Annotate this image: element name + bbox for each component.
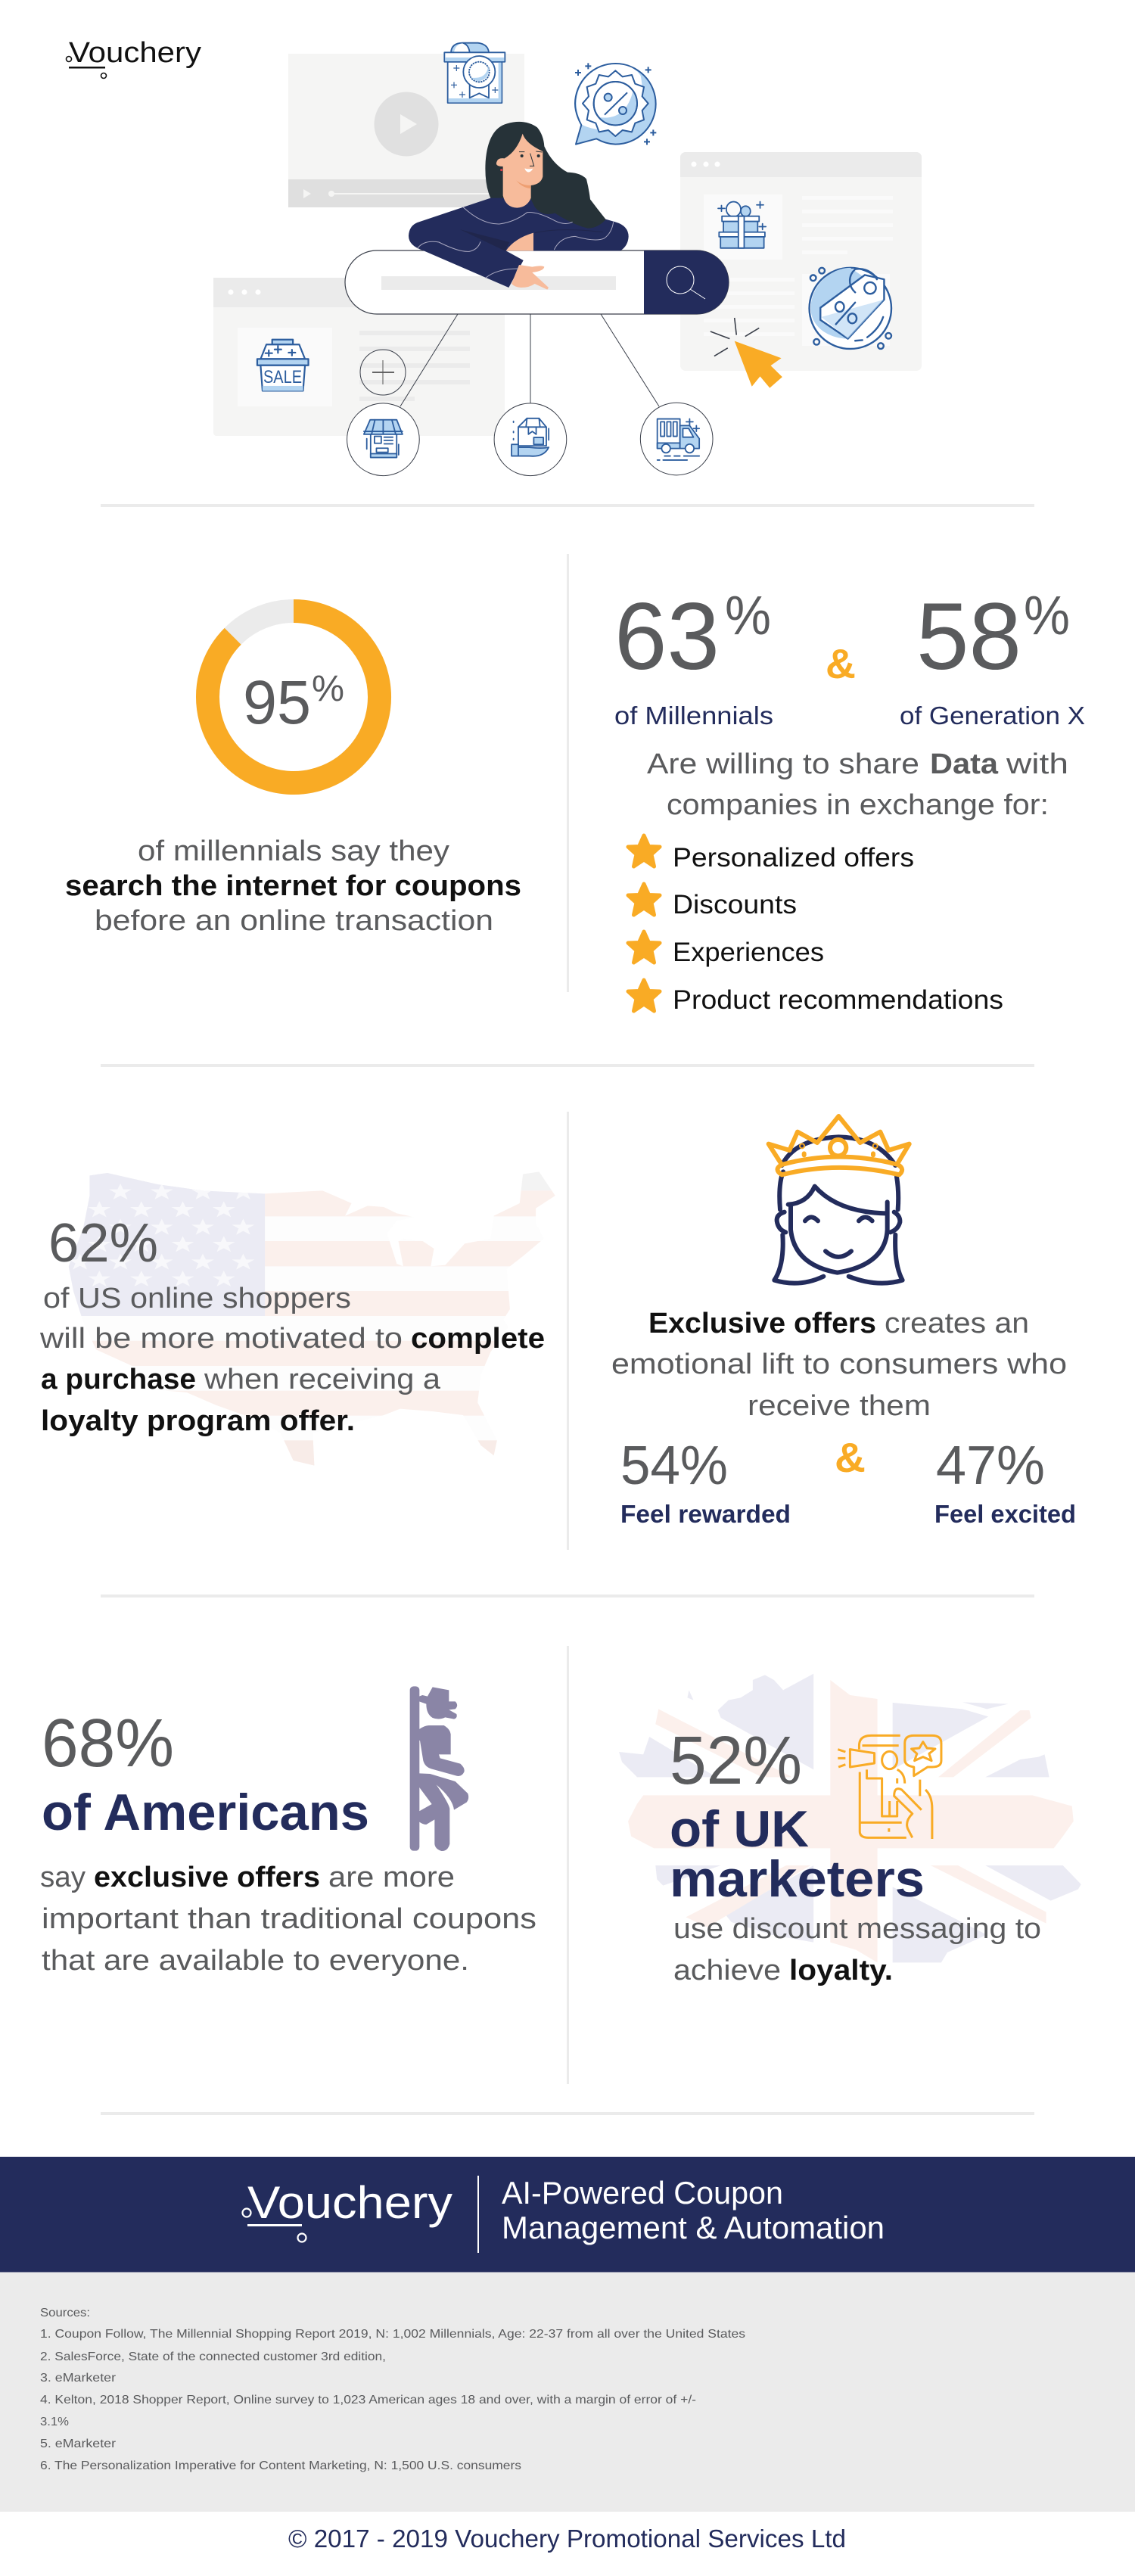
- sources panel: 5. eMarketer: [40, 2438, 117, 2450]
- donut label: %: [312, 669, 344, 709]
- copyright: © 2017 - 2019 Vouchery Promotional Services Ltd: [288, 2525, 846, 2553]
- icon: mobile megaphone: [838, 1735, 941, 1839]
- divider: [101, 504, 1034, 507]
- stat: 47 percent: [934, 1436, 1076, 1528]
- stat: 52 percent: 52%: [670, 1723, 802, 1799]
- subheading: marketers: [670, 1850, 925, 1908]
- intro text: Are willing to share: [647, 748, 919, 780]
- plus button: [360, 350, 406, 395]
- SALE label: SALE: [263, 367, 302, 387]
- sources panel: [0, 2272, 1135, 2512]
- panel: US shoppers: [39, 1165, 568, 1473]
- sources panel: 6. The Personalization Imperative for Content Marketing, N: 1,500 U.S. consumers: [40, 2459, 521, 2472]
- subheading: of Americans: [42, 1784, 369, 1841]
- donut label: 95: [243, 668, 311, 737]
- description: complete: [411, 1323, 545, 1355]
- description: [65, 835, 521, 937]
- stat: 63 percent: [614, 584, 773, 730]
- description: [611, 1308, 1067, 1422]
- description: when receiving a: [204, 1364, 441, 1395]
- description: exclusive offers: [94, 1862, 320, 1893]
- description: use discount messaging to: [673, 1913, 1041, 1945]
- description: important than traditional coupons: [42, 1903, 536, 1935]
- sources panel: 2. SalesForce, State of the connected customer 3rd edition,: [40, 2350, 386, 2363]
- stat: 63 percent: %: [725, 586, 771, 646]
- description: achieve: [673, 1955, 781, 1986]
- ampersand: &: [826, 640, 856, 687]
- sources panel: 3.1%: [40, 2416, 69, 2428]
- ampersand: &: [835, 1434, 866, 1481]
- stat: 58 percent: [900, 584, 1085, 730]
- stat: 63 percent: 63: [614, 584, 720, 689]
- subheading: of UK: [670, 1800, 809, 1858]
- connector lines: [400, 314, 659, 406]
- hero illustration: [67, 37, 922, 476]
- US flag map: [61, 1165, 568, 1473]
- sources panel: 4. Kelton, 2018 Shopper Report, Online survey to 1,023 American ages 18 and over, with a margin of error of +/-: [40, 2394, 696, 2406]
- stat: 54 percent: 54%: [620, 1436, 728, 1496]
- description: receive them: [748, 1390, 931, 1422]
- list: experiences: Experiences: [673, 938, 824, 967]
- description: [673, 1913, 1041, 1986]
- icon: sale basket: [257, 340, 309, 390]
- woman character: [409, 122, 629, 290]
- vertical divider: [567, 1646, 569, 2084]
- tagline: Management & Automation: [502, 2210, 885, 2245]
- list: product recommendations: Product recommendations: [673, 985, 1003, 1015]
- description: a purchase: [41, 1364, 196, 1395]
- intro text: [647, 748, 1068, 821]
- intro text: companies in exchange for:: [667, 789, 1049, 821]
- panel: Americans: [40, 1686, 536, 1977]
- panel: exclusive offers: [611, 1116, 1076, 1528]
- icon: gift boxes: [718, 202, 766, 248]
- description: that are available to everyone.: [42, 1945, 469, 1977]
- description: search the internet for coupons: [65, 870, 521, 902]
- click cursor: [711, 318, 782, 388]
- description: [39, 1283, 545, 1437]
- description: Exclusive offers: [648, 1308, 876, 1339]
- divider: [101, 2112, 1034, 2115]
- icon: percent tag: [810, 268, 891, 349]
- logo: Vouchery white: Vouchery: [247, 2177, 452, 2228]
- donut chart: [207, 611, 380, 782]
- UK flag map: [619, 1674, 1081, 1962]
- subheading: [670, 1800, 925, 1908]
- icon circle: delivery truck: [640, 403, 713, 475]
- intro text: Data: [930, 748, 999, 780]
- stat: 62 percent: 62%: [48, 1213, 158, 1274]
- divider: [101, 1594, 1034, 1598]
- description: [40, 1862, 536, 1977]
- panel: UK marketers: [619, 1674, 1081, 1986]
- donut label: [243, 668, 344, 737]
- stat: 63 percent: of Millennials: [614, 702, 773, 730]
- icons group: [257, 202, 891, 476]
- description: say: [40, 1862, 86, 1893]
- vertical divider: [567, 554, 569, 992]
- logo: Vouchery black: Vouchery: [69, 37, 201, 69]
- browser window right: [680, 152, 922, 371]
- description: before an online transaction: [95, 905, 493, 937]
- stat: 68 percent: 68%: [42, 1706, 174, 1781]
- stat: 54 percent: [620, 1436, 791, 1528]
- list: personalized offers: Personalized offers: [673, 843, 914, 873]
- footer banner: [0, 2157, 1135, 2272]
- panel: data sharing: [614, 584, 1085, 1015]
- description: of millennials say they: [138, 835, 449, 867]
- description: loyalty.: [789, 1955, 893, 1986]
- list: discounts: Discounts: [673, 890, 797, 919]
- logo: Vouchery black: [67, 37, 201, 79]
- stat: 58 percent: of Generation X: [900, 702, 1085, 730]
- icon: person silhouette: [410, 1686, 468, 1851]
- list: experiences: [628, 932, 824, 967]
- list: discounts: [628, 884, 797, 919]
- stat: 54 percent: Feel rewarded: [620, 1500, 791, 1528]
- description: loyalty program offer.: [41, 1405, 355, 1437]
- sources panel: 1. Coupon Follow, The Millennial Shopping Report 2019, N: 1,002 Millennials, Age: 22-37 from all over the United States: [40, 2328, 745, 2341]
- icon: ribbon box: [444, 43, 505, 103]
- stat: 58 percent: 58: [916, 584, 1022, 689]
- sources panel: 3. eMarketer: [40, 2372, 117, 2385]
- tagline: [502, 2175, 885, 2245]
- tagline: AI-Powered Coupon: [502, 2175, 783, 2210]
- stat: 47 percent: Feel excited: [934, 1500, 1076, 1528]
- list: personalized offers: [628, 835, 914, 873]
- intro text: with: [1006, 748, 1068, 780]
- icon: percent badge: [575, 63, 656, 145]
- search bar: [345, 250, 729, 314]
- icon circle: parcel in hand: [494, 403, 567, 476]
- sources panel: Sources:: [40, 2307, 90, 2319]
- description: of US online shoppers: [43, 1283, 351, 1314]
- stat: 58 percent: %: [1024, 586, 1070, 646]
- list: product recommendations: [628, 980, 1003, 1015]
- description: emotional lift to consumers who: [611, 1349, 1067, 1380]
- video player window: [288, 54, 524, 207]
- description: are more: [328, 1862, 455, 1893]
- divider: [101, 1064, 1034, 1067]
- icon circle: store: [347, 403, 419, 476]
- panel: 95 percent: [65, 611, 521, 937]
- stat: 47 percent: 47%: [936, 1436, 1045, 1496]
- description: creates an: [885, 1308, 1029, 1339]
- vertical divider: [567, 1112, 569, 1550]
- browser window left: [213, 278, 505, 436]
- icon: tiara face: [769, 1116, 910, 1283]
- description: will be more motivated to: [39, 1323, 403, 1355]
